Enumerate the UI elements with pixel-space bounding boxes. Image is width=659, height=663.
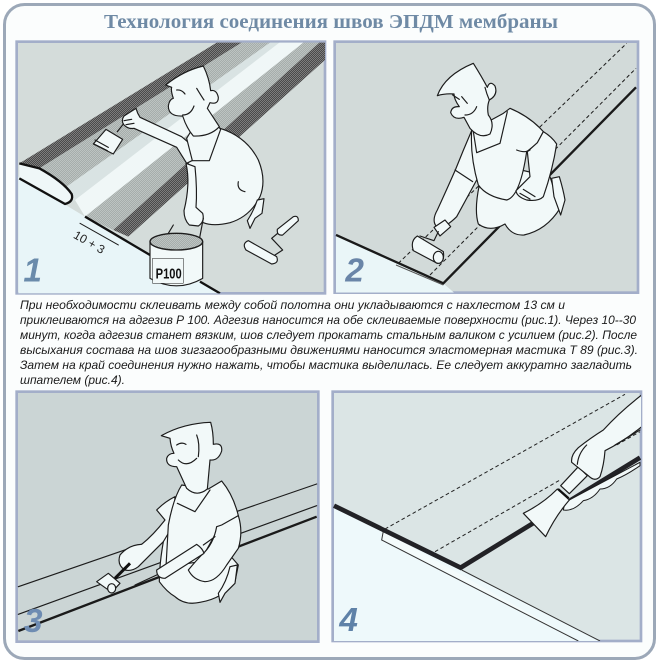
seam lines bbox=[336, 87, 636, 283]
line 6: шпателем (рис.4). bbox=[20, 373, 125, 387]
floor bbox=[334, 505, 600, 641]
number 3: 3 bbox=[24, 603, 43, 640]
lower sheet stripes bbox=[75, 43, 325, 237]
rolled sheet end bbox=[19, 163, 72, 204]
panel 2 background bbox=[335, 42, 638, 293]
panel 2: rolling the seam bbox=[335, 42, 638, 293]
panel 4: smoothing with a spatula bbox=[333, 392, 642, 641]
dashed seam guides bbox=[385, 394, 640, 552]
panel 1 scene bbox=[18, 43, 325, 293]
sealant gun bbox=[135, 537, 215, 585]
panel 3: applying sealant bbox=[17, 392, 318, 642]
hand bbox=[572, 395, 642, 479]
dashed seam guides bbox=[398, 43, 636, 275]
small roller bbox=[97, 563, 130, 593]
panel 2 scene bbox=[336, 43, 636, 293]
number 1: 1 bbox=[23, 253, 42, 290]
overlap strip bbox=[382, 531, 600, 641]
panel 4 scene bbox=[334, 394, 642, 641]
instruction text bbox=[20, 298, 638, 387]
number 4: 4 bbox=[338, 602, 358, 639]
floor bbox=[336, 235, 454, 293]
panel 4 background bbox=[333, 392, 641, 641]
title: Технология соединения швов ЭПДМ мембраны bbox=[104, 11, 558, 33]
adhesive can P100: P100 bbox=[156, 267, 182, 283]
black seam bbox=[334, 458, 640, 568]
brush bbox=[92, 124, 124, 155]
panel 3 background bbox=[17, 392, 318, 642]
overlap dimension bbox=[74, 222, 119, 254]
line 1: При необходимости склеивать между собой полотна они укладываются с нахлестом 13 см и bbox=[20, 298, 565, 312]
number 2: 2 bbox=[344, 253, 364, 290]
worker bbox=[119, 422, 241, 603]
line 5: Затем на край соединения нужно нажать, чтобы мастика выделилась. Ее следует аккуратно загладить bbox=[20, 358, 632, 372]
line 4: высыхания состава на шов зигзагообразными движениями наносится эластомерная мастика Т 89 (рис.3). bbox=[20, 343, 638, 357]
spatula bbox=[523, 467, 587, 537]
overlap dimension: 10 + 3 bbox=[71, 228, 108, 257]
worker bbox=[434, 63, 565, 235]
line 2: приклеиваются на адгезив Р 100. Адгезив наносится на обе склеиваемые поверхности (рис.1). Через 10--30 bbox=[20, 313, 636, 327]
floor bbox=[18, 177, 220, 293]
panel 3 scene bbox=[18, 422, 317, 640]
paint roller bbox=[244, 216, 298, 264]
upper sheet stripes bbox=[19, 43, 279, 202]
seam lines bbox=[18, 484, 317, 631]
panel 1 background bbox=[17, 42, 325, 293]
panel 1: applying adhesive bbox=[17, 42, 325, 293]
line 3: минут, когда адгезив станет вязким, шов следует прокатать стальным валиком с усилием (рис.2). После bbox=[20, 328, 637, 342]
steel roller bbox=[412, 220, 451, 263]
seam edge bbox=[85, 217, 220, 293]
squeezed sealant bbox=[563, 462, 640, 510]
adhesive can P100 bbox=[150, 233, 203, 286]
worker bbox=[122, 66, 264, 253]
